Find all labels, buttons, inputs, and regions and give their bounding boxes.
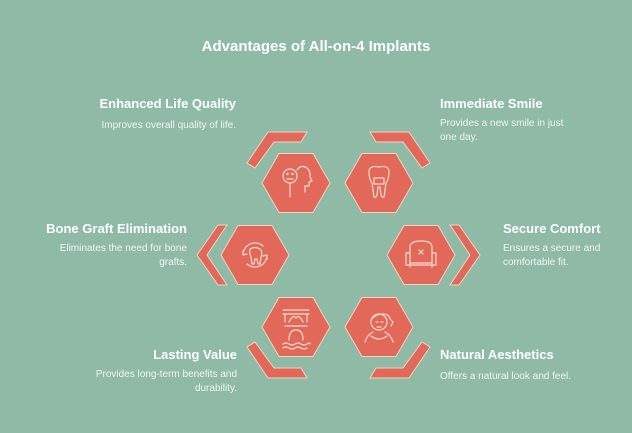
icon: tooth crown <box>369 167 389 197</box>
arc: top-right <box>370 132 430 168</box>
text: Natural Aesthetics: Offers a natural look and feel. <box>440 371 571 382</box>
hex: middle-left <box>221 226 289 284</box>
text: Immediate Smile <box>440 96 564 143</box>
text: Secure Comfort <box>503 221 601 268</box>
text: Bone Graft Elimination: Bone Graft Elimination <box>46 221 187 236</box>
icon: armchair <box>406 241 436 267</box>
text: Bone Graft Elimination: Eliminates the need for bone <box>60 243 187 254</box>
icon: tooth cycle <box>243 243 267 267</box>
text: Immediate Smile: Immediate Smile <box>440 96 543 111</box>
text: Lasting Value: Lasting Value <box>153 347 237 362</box>
text: Lasting Value <box>96 347 237 394</box>
icon: bridge <box>283 310 310 349</box>
text: Natural Aesthetics <box>440 347 571 382</box>
hex: bottom-right <box>345 298 413 356</box>
text: Secure Comfort: Ensures a secure and <box>503 243 600 254</box>
chevron: middle-left <box>197 225 227 285</box>
text: Secure Comfort: comfortable fit. <box>503 257 569 268</box>
text: Enhanced Life Quality <box>99 96 236 131</box>
arc: bottom-right <box>370 342 430 378</box>
arc: bottom-left <box>247 342 307 378</box>
text: Bone Graft Elimination <box>46 221 187 268</box>
text: Natural Aesthetics: Natural Aesthetics <box>440 347 554 362</box>
chevron: middle-right <box>450 225 480 285</box>
arc: top-left <box>247 132 307 168</box>
text: Secure Comfort: Secure Comfort <box>503 221 601 236</box>
title: Advantages of All-on-4 Implants <box>202 38 430 55</box>
icon: woman <box>365 314 393 342</box>
hex: bottom-left <box>262 298 330 356</box>
text: Lasting Value: Provides long-term benefits and <box>96 369 237 380</box>
text: Enhanced Life Quality: Improves overall quality of life. <box>101 120 236 131</box>
text: Immediate Smile: one day. <box>440 132 478 143</box>
text: Bone Graft Elimination: grafts. <box>159 257 187 268</box>
hex: middle-right <box>387 226 455 284</box>
hex: top-right <box>345 154 413 212</box>
text: Enhanced Life Quality: Enhanced Life Quality <box>99 96 236 111</box>
icon: face <box>283 166 312 197</box>
text: Immediate Smile: Provides a new smile in just <box>440 118 563 129</box>
hex: top-left <box>262 154 330 212</box>
text: Lasting Value: durability. <box>195 383 237 394</box>
